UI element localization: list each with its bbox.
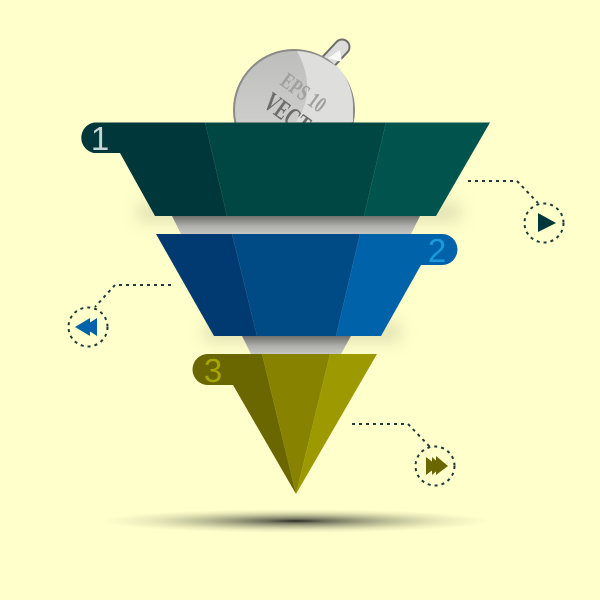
number 2: 2 [428, 232, 446, 269]
icon: rewind [75, 318, 97, 336]
soft shadows [138, 203, 460, 341]
connector 1 with play icon [468, 181, 564, 242]
number 1: 1 [91, 120, 109, 157]
gray connector 2 [242, 336, 351, 354]
panel 3 [192, 352, 377, 494]
ground shadow [101, 509, 491, 533]
gray connector 1 [172, 216, 420, 234]
infographic: three-tier funnel [68, 38, 564, 532]
panel 1 [81, 120, 490, 216]
panel 2 [156, 232, 457, 336]
coin label: VECTOR [259, 86, 338, 156]
coin label: EPS 10 [276, 68, 331, 118]
number 3: 3 [204, 352, 222, 389]
connector 2 with rewind icon [68, 285, 171, 346]
connector 3 with fast-forward icon [352, 424, 454, 486]
icon: fast forward [426, 456, 448, 475]
coin with text [233, 38, 355, 122]
icon: play [538, 213, 556, 232]
coin label [266, 72, 326, 122]
